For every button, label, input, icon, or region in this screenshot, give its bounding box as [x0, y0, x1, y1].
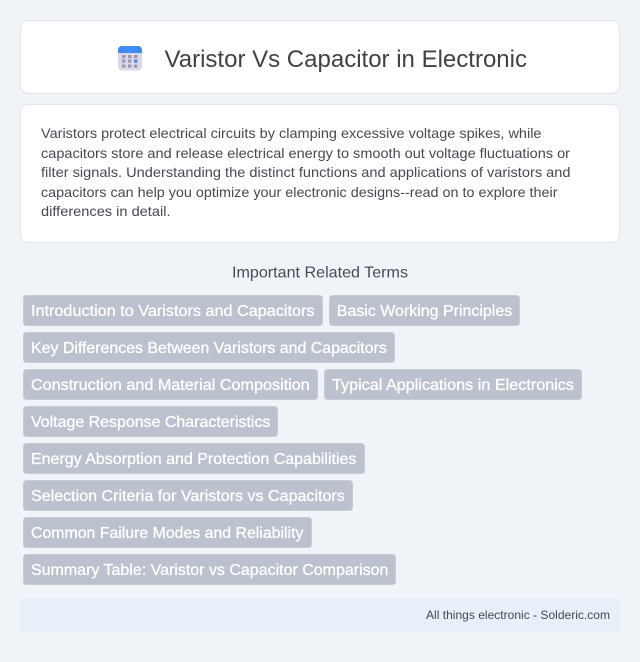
chip: key differences: Key Differences Between Varistors and Capacitors	[31, 340, 387, 357]
chip: summary table	[24, 554, 396, 584]
chip: key differences	[24, 332, 394, 362]
text block: intro: capacitors store and release electrical energy to smooth out voltage fluctuations or	[41, 145, 570, 161]
text block: intro: capacitors can help you optimize your electronic designs--read on to explore their	[41, 184, 558, 200]
panel: term chips	[24, 296, 582, 584]
chip: working principles: Basic Working Principles	[337, 303, 512, 320]
chip: failure modes	[24, 518, 312, 548]
text block: intro: filter signals. Understanding the distinct functions and applications of varistors and	[41, 164, 570, 180]
chip: energy absorption	[24, 444, 364, 474]
chip: selection criteria: Selection Criteria for Varistors vs Capacitors	[31, 488, 345, 505]
chip: summary table: Summary Table: Varistor vs Capacitor Comparison	[31, 562, 388, 579]
chip: failure modes: Common Failure Modes and Reliability	[31, 525, 303, 542]
chip: construction	[24, 370, 318, 400]
chip: energy absorption: Energy Absorption and Protection Capabilities	[31, 451, 356, 468]
text block: intro: differences in detail.	[41, 203, 170, 219]
chip: introduction	[24, 296, 322, 326]
text block: intro	[41, 125, 570, 219]
chip: working principles	[330, 296, 520, 326]
footer text: All things electronic - Solderic.com	[426, 608, 610, 622]
heading: related terms: Important Related Terms	[232, 264, 408, 282]
chip: construction: Construction and Material Composition	[31, 377, 310, 394]
panel: header	[20, 20, 620, 94]
title: Varistor Vs Capacitor in Electronic	[164, 46, 527, 73]
chip: applications: Typical Applications in Electronics	[332, 377, 574, 394]
chip: voltage response	[24, 406, 278, 436]
chip: introduction: Introduction to Varistors and Capacitors	[31, 303, 314, 320]
panel: intro paragraph	[20, 104, 620, 242]
footer	[20, 598, 620, 632]
chip: applications	[324, 370, 582, 400]
chip: voltage response: Voltage Response Characteristics	[31, 414, 270, 431]
icon: calendar	[118, 46, 142, 70]
text block: intro: Varistors protect electrical circuits by clamping excessive voltage spikes, while	[41, 125, 542, 141]
chip: selection criteria	[24, 480, 352, 510]
